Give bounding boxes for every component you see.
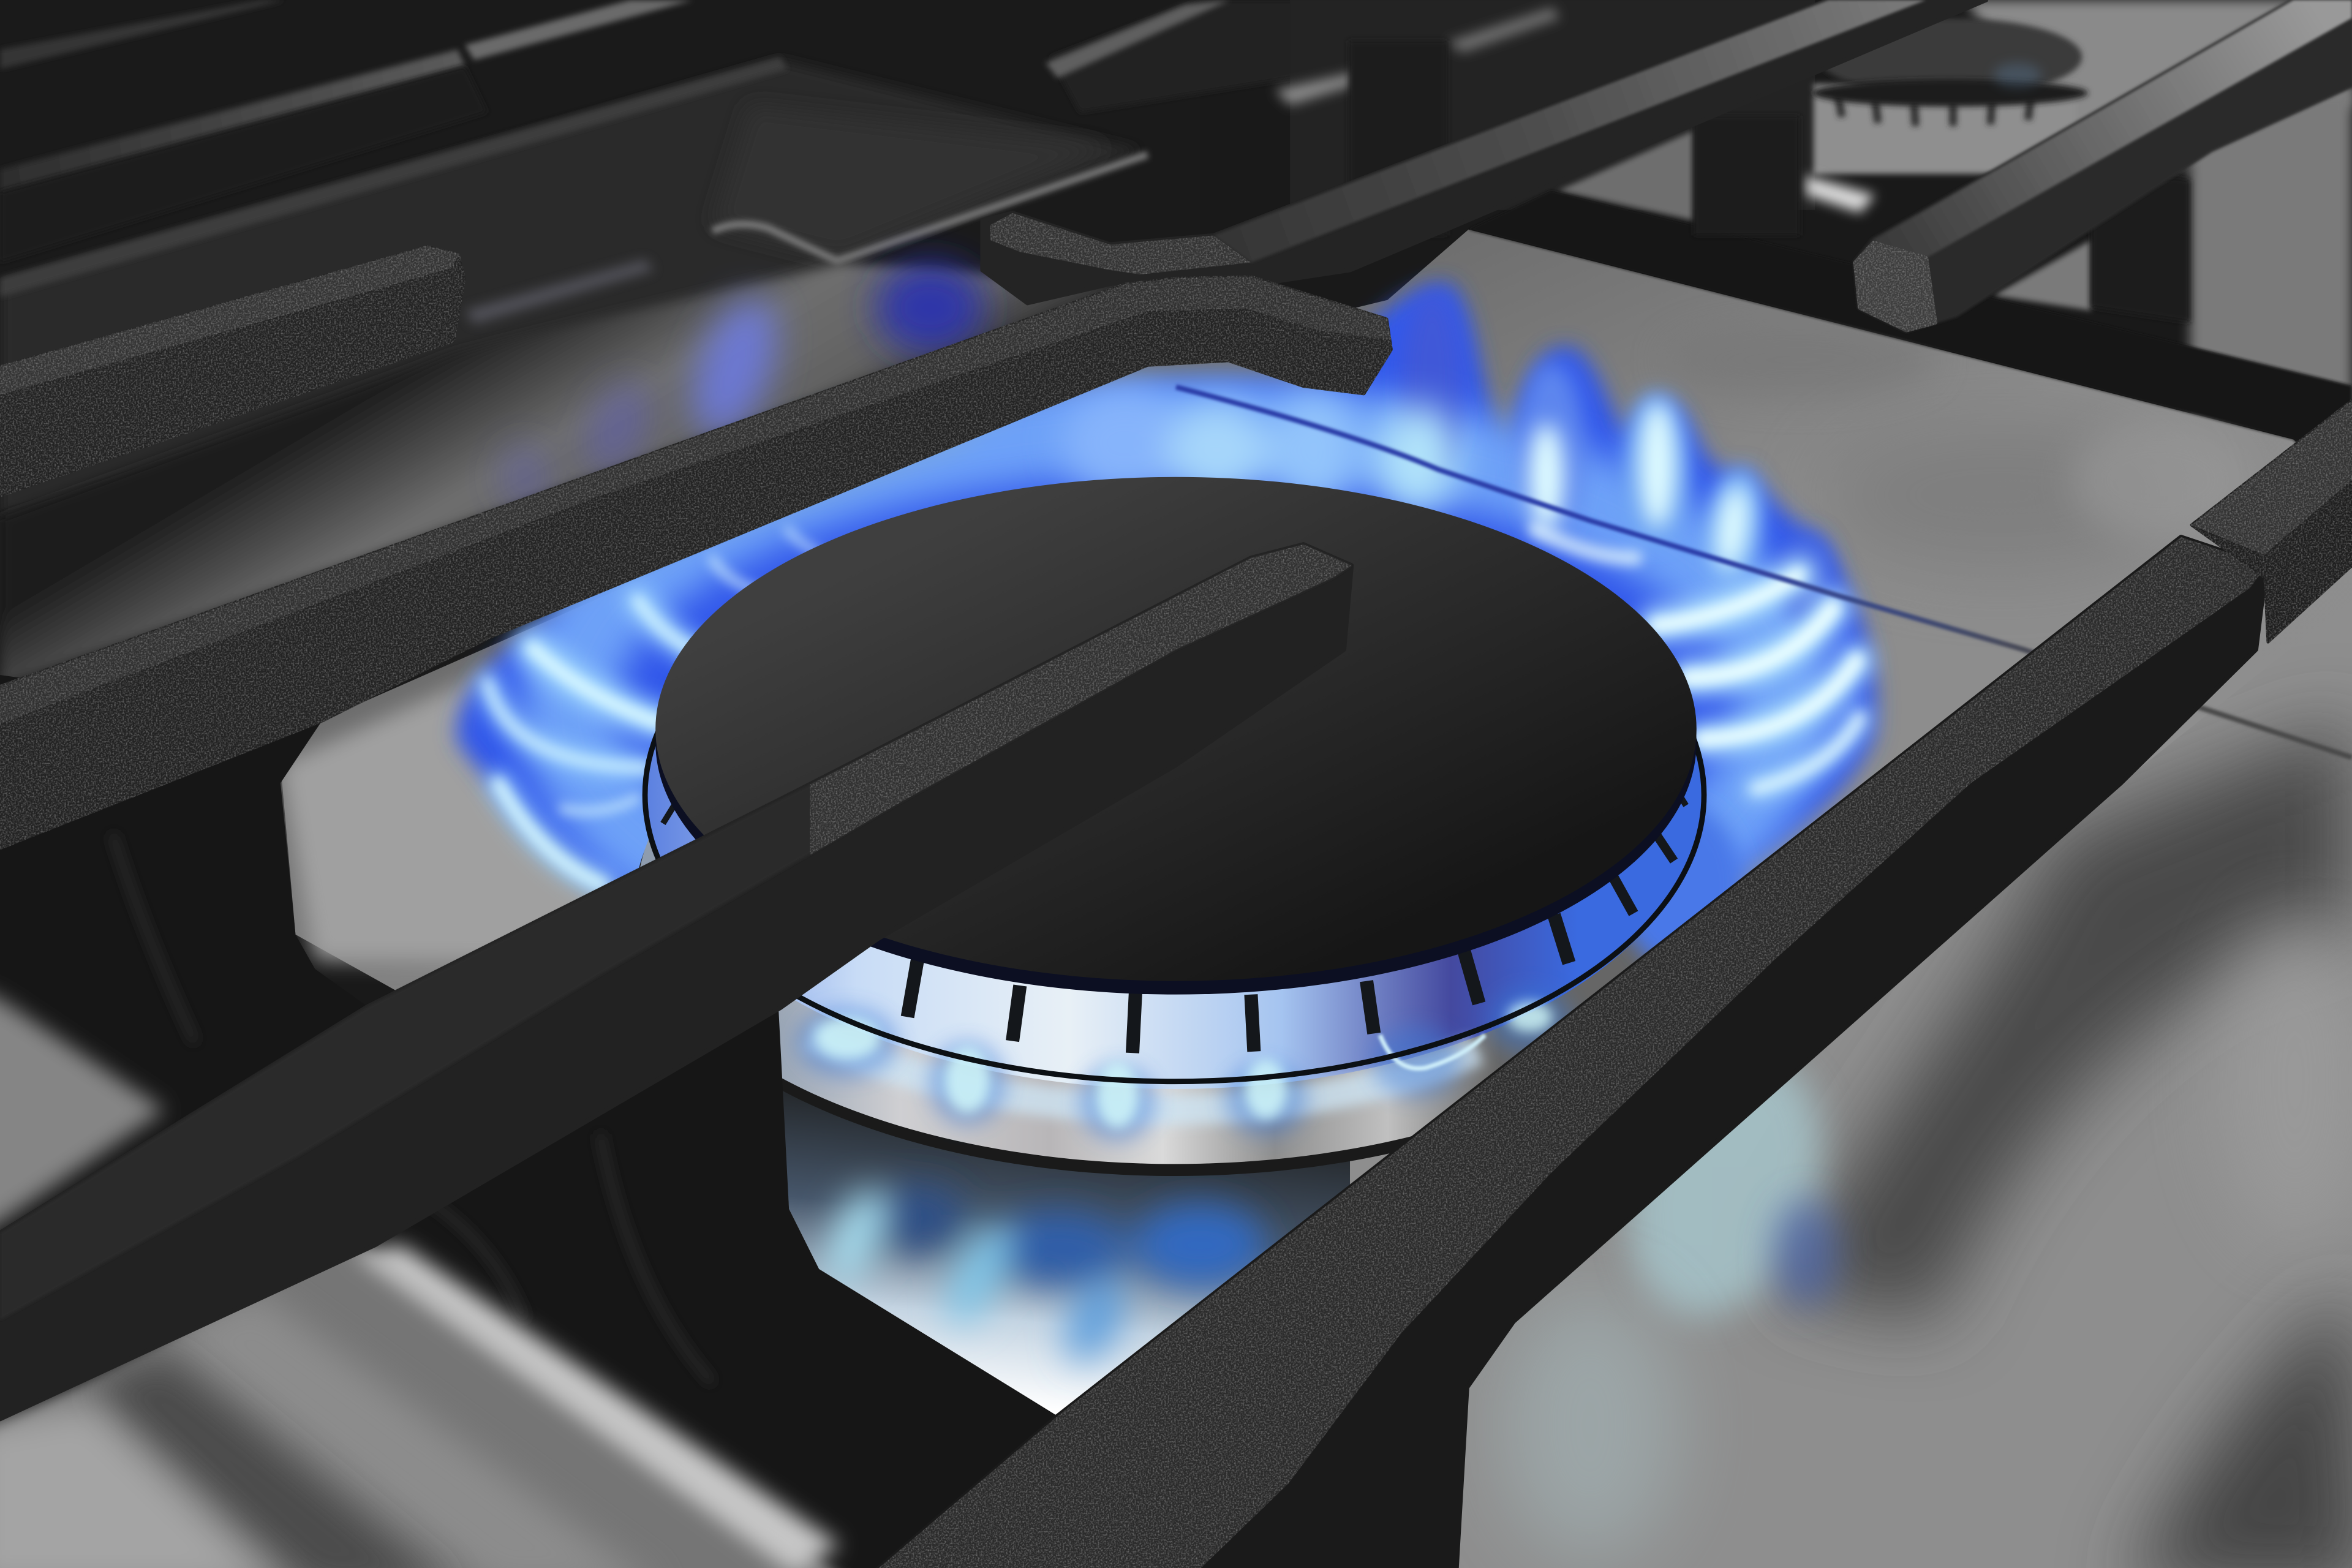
flames: back tongues — [1062, 290, 1834, 622]
middle grate bar finger — [0, 545, 1352, 1419]
right end grate bar segment — [2192, 401, 2352, 642]
upper right grate bar — [1855, 0, 2352, 330]
flames: blue glow — [457, 282, 1877, 975]
stainless reflections lower right — [1487, 698, 2352, 1568]
burner cap underside — [655, 491, 1697, 995]
back area: upper left trays and rails — [0, 0, 2352, 518]
stub grate bar upper left — [0, 247, 464, 495]
flames: light blue inner halo — [568, 428, 1784, 982]
large front right grate bar — [878, 537, 2266, 1568]
far burner — [1806, 18, 2088, 213]
burner cap — [655, 477, 1697, 981]
flames: bright arcs left — [488, 529, 818, 885]
burner assembly — [635, 477, 1743, 1176]
far grate legs — [1349, 40, 2190, 323]
lower window reflection on cooktop — [783, 1091, 1350, 1415]
black support ring — [645, 508, 1704, 1082]
burner body silver ring — [635, 624, 1743, 1176]
flame bulbs at burner front — [796, 987, 1572, 1142]
main grate bar with cross finger — [0, 277, 1390, 848]
faint far flames left — [501, 263, 984, 510]
burner teeth — [663, 794, 1686, 1053]
frame contour details — [113, 834, 712, 1383]
crease line running through flames and steel — [1176, 387, 2352, 758]
stainless patch lower left upper piece — [0, 960, 165, 1275]
burner floor with flame color — [647, 507, 1703, 1089]
back frame rail — [1469, 190, 2352, 510]
stainless patch bottom left — [0, 1237, 862, 1568]
upper cross grate bar — [982, 0, 1986, 303]
flames: bright arcs right — [1536, 529, 1860, 789]
dark grate frame lower left — [0, 675, 1058, 1568]
